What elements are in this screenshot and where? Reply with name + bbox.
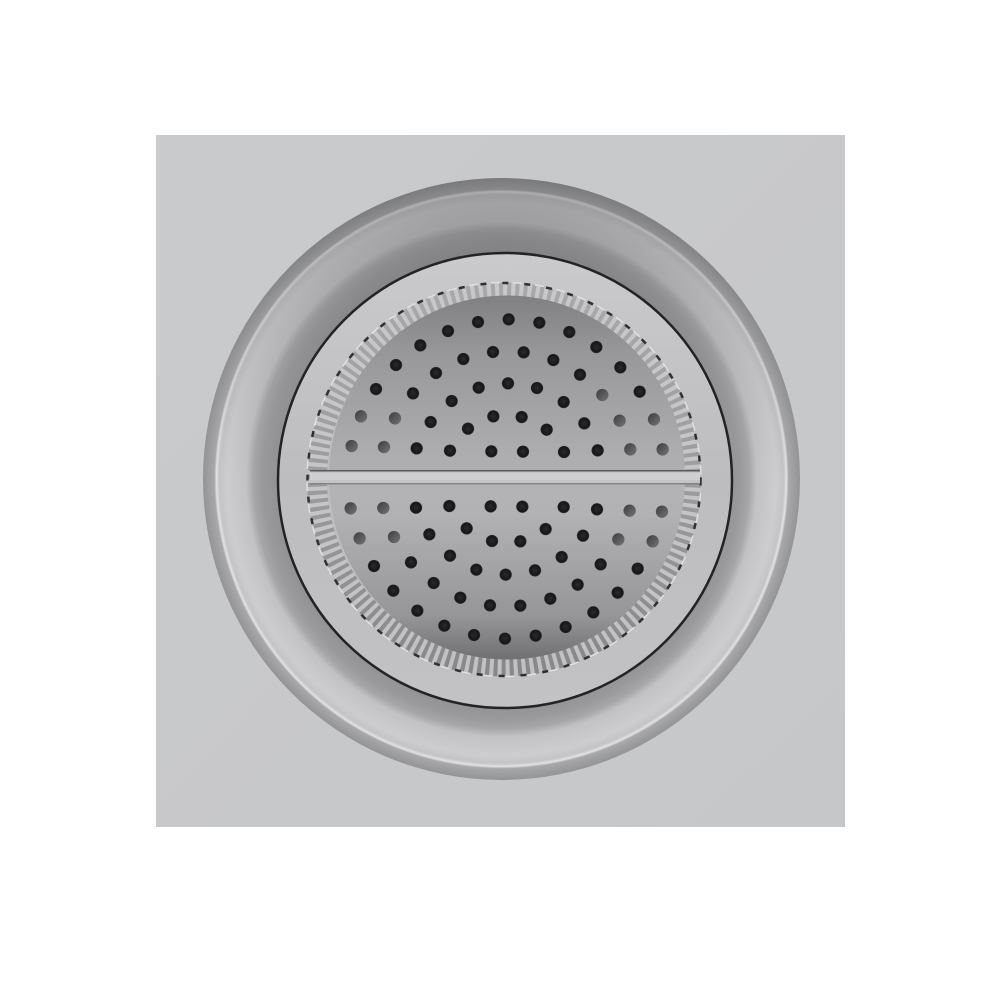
basket floor: upper half [329,296,685,470]
lower holes [344,500,668,645]
perforated basket [307,282,701,676]
crimped rim [307,282,701,676]
product illustration: square drain [156,135,845,827]
raised circular ring [203,178,800,780]
basket floor: lower half [330,484,685,660]
centre divider bar [310,470,700,484]
inner seat with dark gap [278,253,732,708]
square cover plate [156,135,845,827]
upper holes [345,313,669,458]
